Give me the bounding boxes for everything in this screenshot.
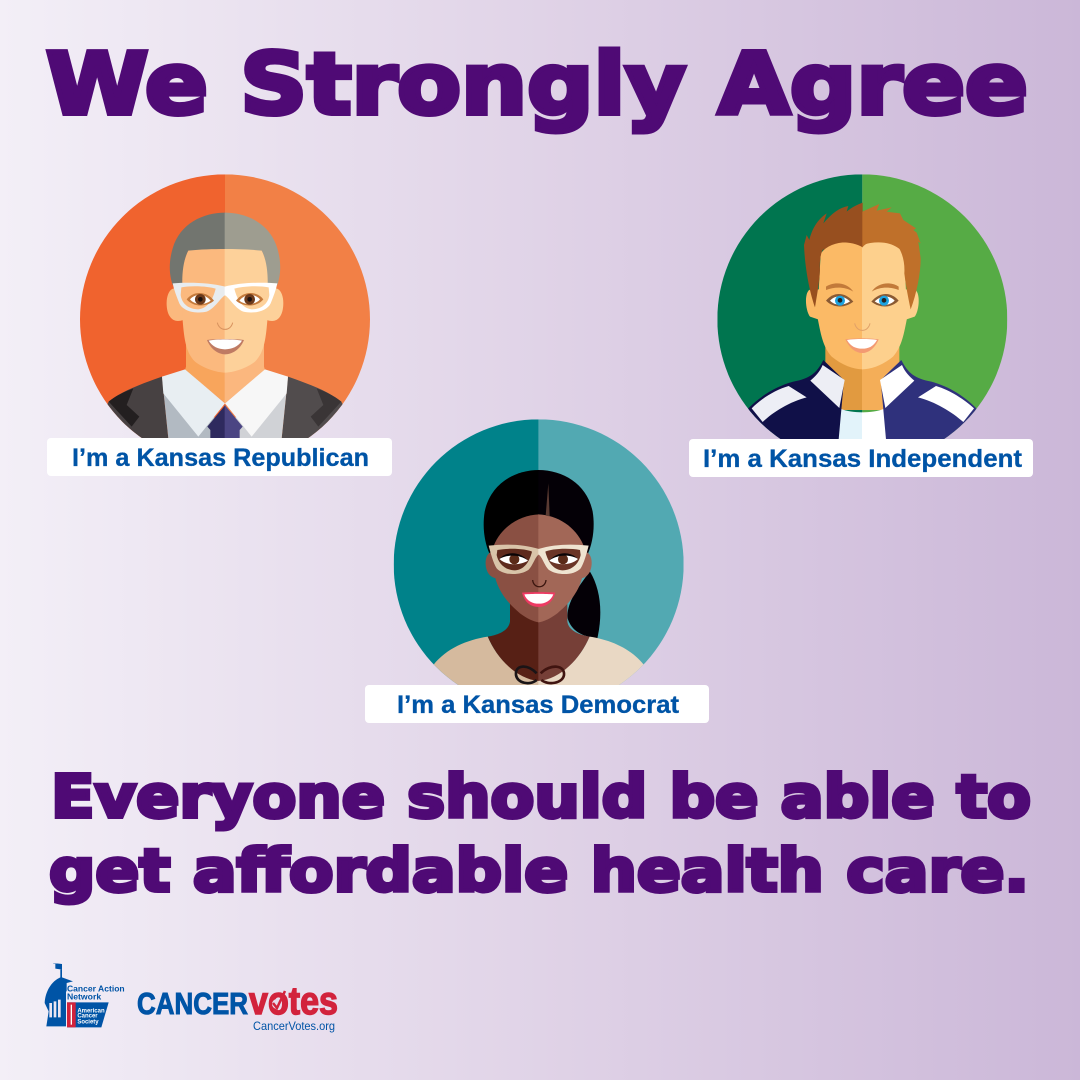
logo: Cancer Action Network: Cancer Action [67, 983, 125, 993]
title: We Strongly Agree [46, 36, 1028, 134]
logo: Cancer Action Network [45, 963, 125, 1027]
portrait: Kansas Republican [80, 170, 370, 438]
logo: CancerVotes: CancerVotes.org [253, 1019, 335, 1033]
logo: Cancer Action Network: Society [77, 1020, 99, 1026]
statement [49, 762, 1031, 905]
label: Republican [47, 438, 392, 476]
logo: Cancer Action Network: Cancer [77, 1014, 98, 1020]
label: Democrat: I’m a Kansas Democrat [397, 691, 680, 719]
logo: CancerVotes [137, 980, 338, 1033]
logo: CancerVotes: CANCER [137, 986, 248, 1021]
statement: get affordable health care. [49, 836, 1029, 905]
portrait: Kansas Independent [717, 170, 1007, 439]
label: Republican: I’m a Kansas Republican [72, 444, 369, 472]
label: Independent: I’m a Kansas Independent [703, 445, 1023, 473]
portrait: Kansas Democrat [394, 415, 684, 685]
statement: Everyone should be able to [51, 762, 1031, 831]
label: Democrat [365, 685, 709, 723]
logo: Cancer Action Network: American [77, 1008, 105, 1014]
logo: Cancer Action Network: Network [67, 992, 101, 1002]
logo: CancerVotes: votes [249, 980, 338, 1023]
label: Independent [689, 439, 1033, 477]
